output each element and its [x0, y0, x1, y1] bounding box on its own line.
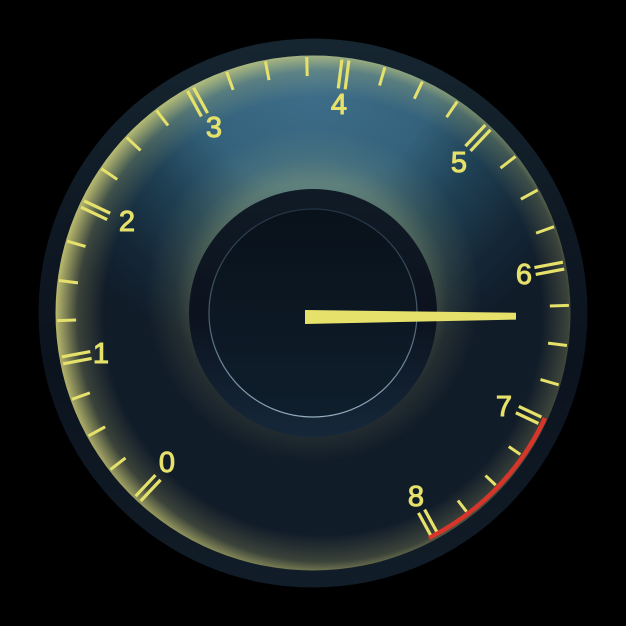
center hub — [189, 189, 437, 437]
inner disk with thin ring — [209, 209, 417, 417]
major double ticks — [62, 60, 564, 535]
dial numbers: 5 — [451, 147, 467, 179]
dial numbers: 7 — [496, 391, 512, 423]
dial numbers: 3 — [206, 112, 222, 144]
redline arc — [429, 418, 545, 538]
dial numbers: 0 — [159, 447, 175, 479]
dial numbers: 1 — [93, 338, 109, 370]
dial numbers: 6 — [516, 259, 532, 291]
dial numbers — [93, 89, 532, 513]
outer bezel ring — [38, 38, 588, 588]
needle — [305, 310, 516, 324]
dial face — [56, 56, 570, 570]
dial numbers: 8 — [408, 481, 424, 513]
dial numbers: 2 — [119, 206, 135, 238]
minor ticks — [57, 57, 569, 512]
dial numbers: 4 — [331, 89, 347, 121]
